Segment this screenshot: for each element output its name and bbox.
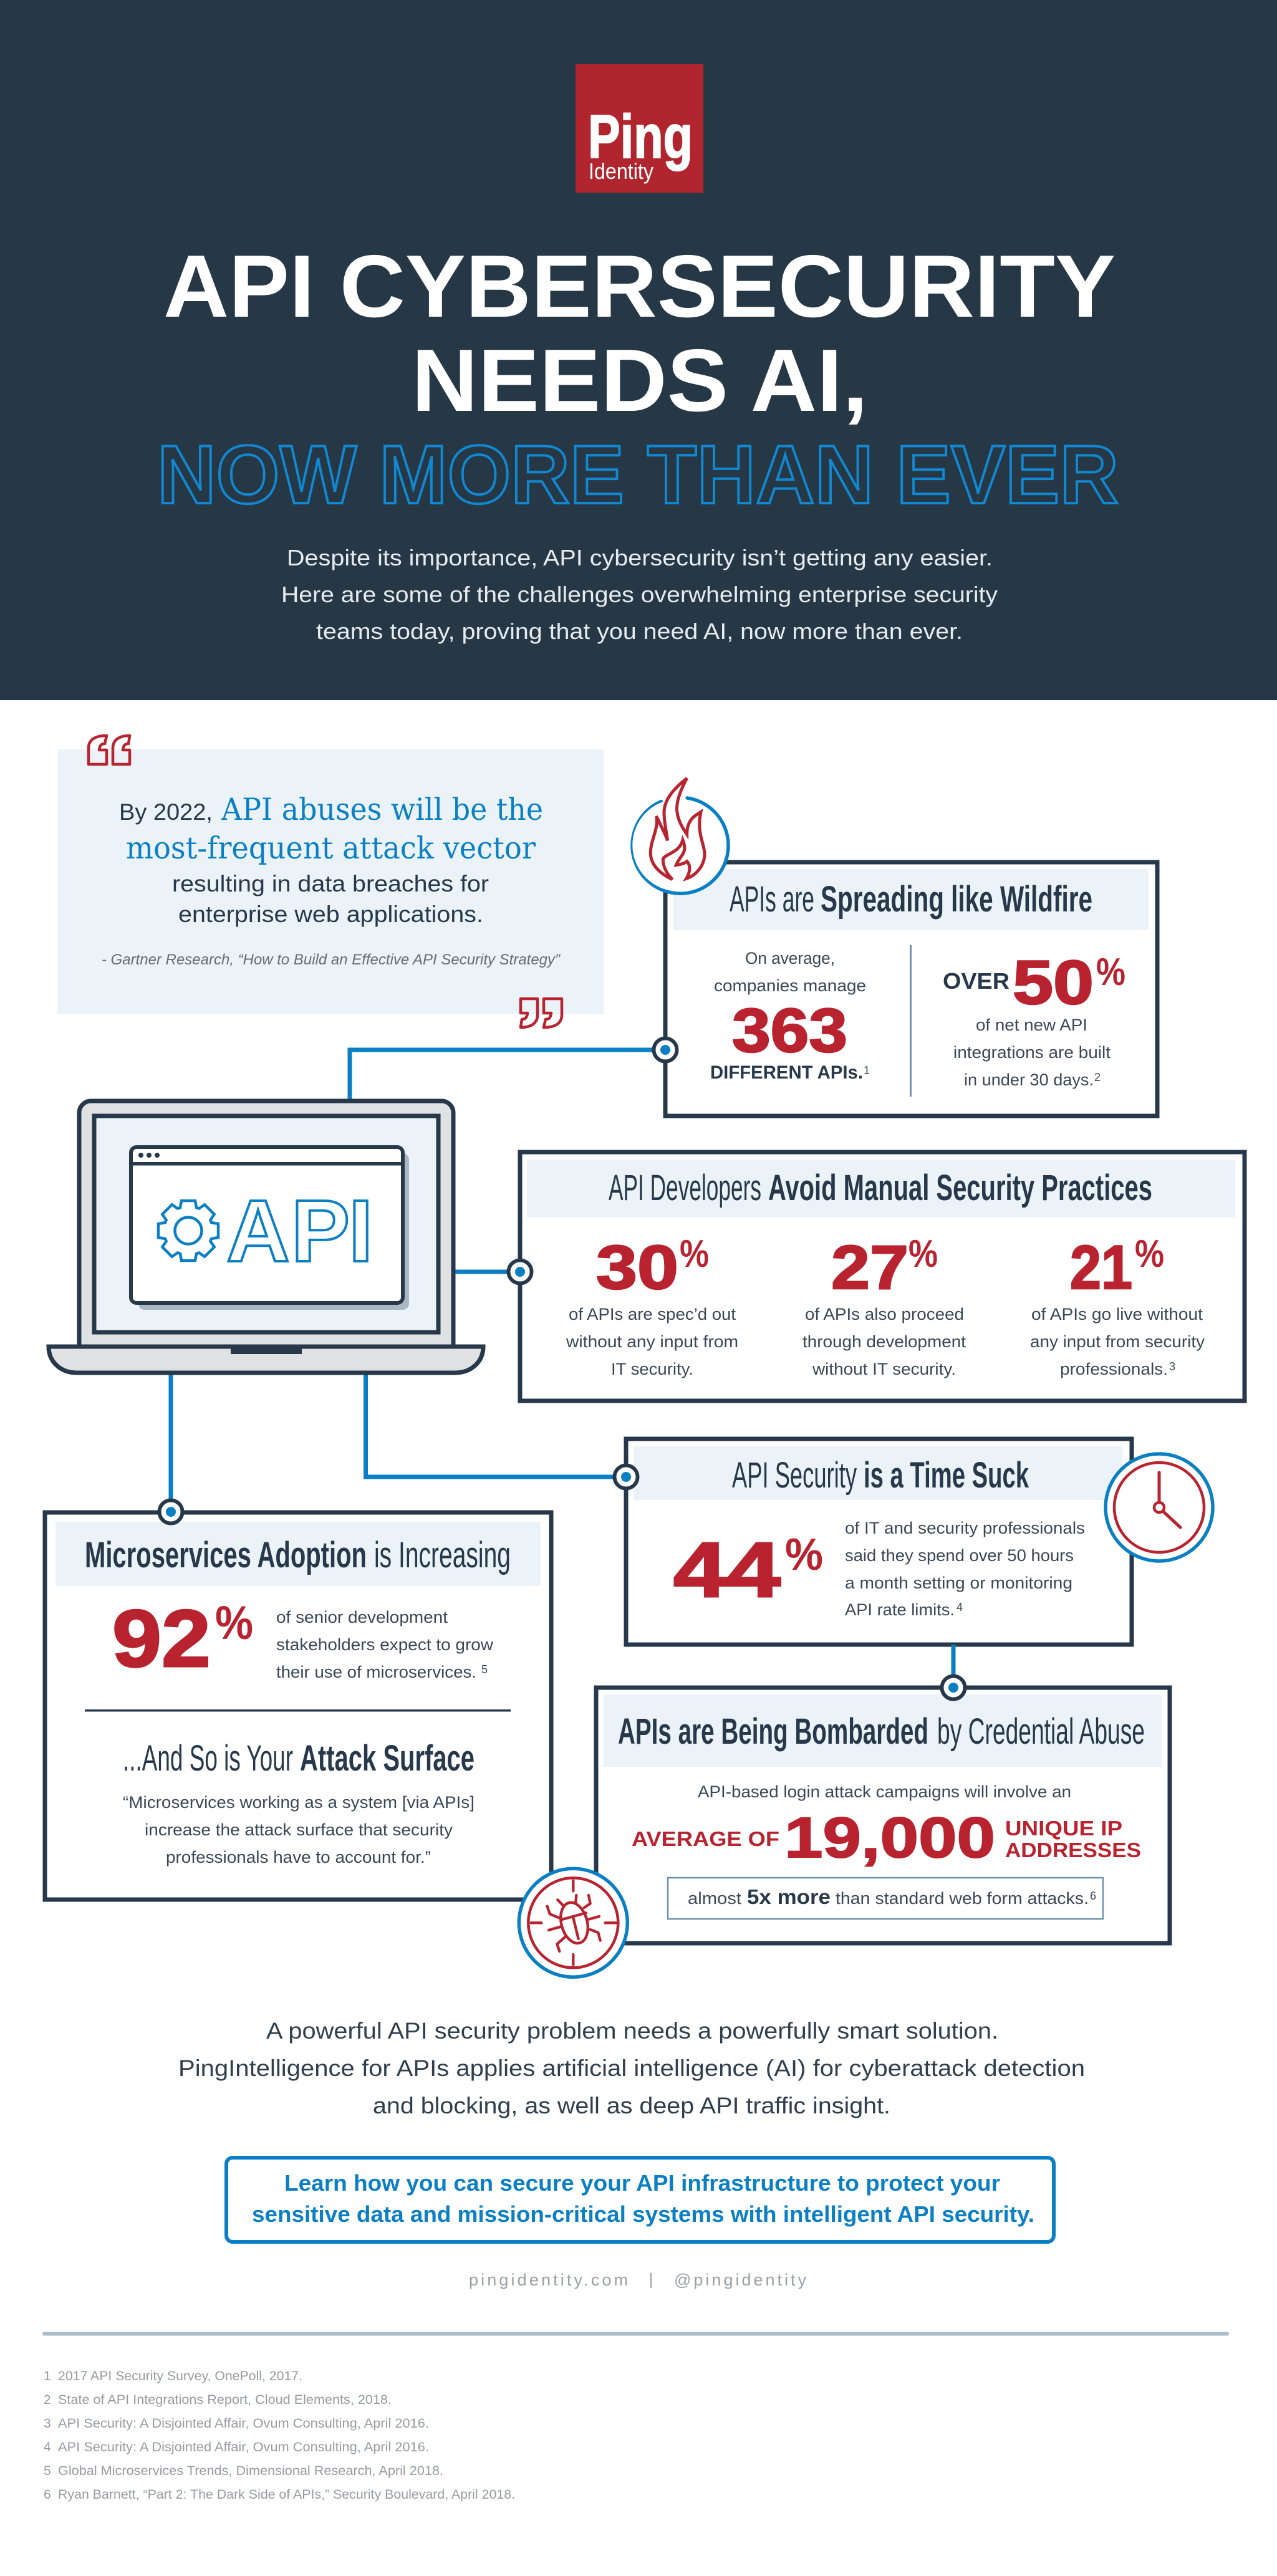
API outlined label: API (226, 1181, 373, 1280)
stat: over 50 percent: OVER (943, 968, 1010, 994)
footnotes: API Security: A Disjointed Affair, Ovum Consulting, April 2016. (58, 2440, 429, 2454)
heading (609, 1168, 1152, 1208)
icon: opening quote mark (89, 736, 130, 764)
quote text: - Gartner Research, “How to Build an Effective API Security Strategy” (102, 951, 561, 968)
stat: 363 different APIs: 363 (732, 996, 847, 1065)
intro paragraph: Here are some of the challenges overwhelming enterprise security (281, 582, 998, 607)
stat: 21 percent: professionals. (1060, 1360, 1168, 1378)
stat: over 50 percent: % (1096, 951, 1125, 994)
logo: Ping Identity: Identity (589, 158, 653, 184)
closing paragraph (178, 2018, 1085, 2118)
panel: APIs are Being Bombarded (596, 1688, 1170, 1943)
stat: 27 percent: without IT security. (812, 1360, 956, 1378)
stat: 27 percent (802, 1233, 966, 1378)
callout: 5x more: 6 (1090, 1890, 1096, 1902)
stat: 30 percent: 30 (596, 1233, 678, 1302)
stat: 19,000 IP addresses: AVERAGE OF (632, 1827, 779, 1850)
heading: Spreading like Wildfire (821, 879, 1092, 920)
intro paragraph: teams today, proving that you need AI, now more than ever. (316, 618, 963, 644)
stat: 27 percent: % (908, 1233, 938, 1276)
stat: 92 percent: % (215, 1597, 253, 1650)
stat: 19,000 IP addresses: ADDRESSES (1005, 1838, 1141, 1862)
footnotes: API Security: A Disjointed Affair, Ovum Consulting, April 2016. (58, 2416, 429, 2431)
stat: 19,000 IP addresses (632, 1782, 1141, 1870)
stat: 363 different APIs (710, 949, 870, 1083)
stat: 27 percent: of APIs also proceed (805, 1305, 964, 1324)
panel: Microservices Adoption (45, 1512, 551, 1900)
heading: APIs are (730, 879, 814, 920)
quote: microservices: “Microservices working as a system [via APIs] (123, 1793, 475, 1812)
stat: 21 percent: 21 (1070, 1233, 1132, 1302)
website and handle (469, 2271, 807, 2289)
stat: 363 different APIs: On average, (745, 949, 835, 968)
stat: 21 percent: of APIs go live without (1031, 1305, 1203, 1324)
heading: is Increasing (374, 1535, 511, 1575)
quote: microservices: professionals have to account for.” (166, 1848, 431, 1867)
callout: 5x more (668, 1878, 1103, 1919)
stat: over 50 percent: 2 (1094, 1071, 1101, 1084)
logo: Ping Identity: Ping (588, 102, 693, 171)
panel: APIs are Spreading like Wildfire (665, 862, 1157, 1116)
quote text: API abuses will be the (221, 792, 543, 827)
heading: by Credential Abuse (937, 1711, 1145, 1752)
call to action box: sensitive data and mission-critical systems with intelligent API security. (252, 2201, 1034, 2227)
stat: 44 percent (673, 1519, 1085, 1619)
stat: 21 percent: any input from security (1030, 1332, 1205, 1351)
stat: 92 percent: their use of microservices. (276, 1663, 476, 1681)
icon: clock (1106, 1454, 1213, 1561)
panel: API Developers Avoid Manual Security Practices (520, 1152, 1245, 1401)
quote text: most-frequent attack vector (126, 830, 536, 866)
sub-heading: attack surface: Attack Surface (300, 1738, 475, 1779)
stat: 21 percent (1030, 1233, 1205, 1378)
quote text (102, 792, 561, 968)
footnotes: 2 (44, 2393, 51, 2407)
panel: API Security is a Time Suck (626, 1439, 1132, 1645)
stat: 363 different APIs: 1 (864, 1064, 870, 1077)
callout: 5x more: than standard web form attacks. (836, 1889, 1089, 1908)
quote panel (57, 736, 604, 1027)
footnotes: 3 (44, 2416, 51, 2431)
stat: 19,000 IP addresses: API-based login attack campaigns will involve an (698, 1782, 1071, 1801)
stat: 30 percent: IT security. (611, 1360, 693, 1378)
heading (730, 879, 1092, 920)
heading: Microservices Adoption (85, 1535, 367, 1575)
title: API CYBERSECURITY (163, 237, 1116, 336)
heading (732, 1455, 1029, 1496)
stat: over 50 percent: integrations are built (953, 1043, 1111, 1062)
stat: 27 percent: 27 (831, 1233, 908, 1302)
connector nodes (160, 1039, 965, 1699)
title: NEEDS AI, (412, 331, 868, 430)
closing paragraph: and blocking, as well as deep API traffic insight. (373, 2093, 890, 2118)
intro paragraph (281, 545, 998, 644)
logo: Ping Identity (576, 64, 703, 193)
website and handle: pingidentity.com (469, 2271, 628, 2289)
stat: 21 percent: % (1135, 1233, 1164, 1276)
call to action box (226, 2158, 1054, 2242)
stat: 30 percent: of APIs are spec’d out (569, 1305, 736, 1324)
icon: laptop with API window (49, 1101, 483, 1373)
heading: API Developers (609, 1168, 761, 1208)
heading: APIs are Being Bombarded (618, 1711, 928, 1752)
footnotes: 5 (44, 2464, 51, 2478)
sub-heading: attack surface: ...And So is Your (123, 1738, 293, 1779)
stat: 44 percent: of IT and security professionals (845, 1519, 1085, 1537)
footnotes: State of API Integrations Report, Cloud Elements, 2018. (58, 2393, 392, 2407)
call to action box: Learn how you can secure your API infrastructure to protect your (284, 2170, 1000, 2196)
quote text: By 2022, (119, 799, 213, 825)
stat: 92 percent: of senior development (276, 1608, 448, 1627)
closing paragraph: PingIntelligence for APIs applies artificial intelligence (AI) for cyberattack detection (178, 2055, 1085, 2081)
stat: 30 percent: % (680, 1233, 709, 1276)
connector lines (171, 1050, 953, 1688)
stat: 92 percent (112, 1593, 494, 1684)
footnotes: 6 (44, 2487, 51, 2502)
icon: bug target (519, 1868, 627, 1977)
stat: 363 different APIs: DIFFERENT APIs. (710, 1062, 863, 1083)
quote: microservices (123, 1793, 475, 1867)
stat: 19,000 IP addresses: 19,000 (784, 1806, 995, 1870)
stat: 44 percent: a month setting or monitoring (845, 1574, 1072, 1592)
heading: API Security (732, 1455, 857, 1496)
stat: 44 percent: % (785, 1530, 823, 1580)
stat: 92 percent: 92 (112, 1593, 211, 1684)
callout: 5x more: almost (688, 1889, 742, 1908)
stat: 363 different APIs: companies manage (714, 976, 866, 995)
footnotes: Global Microservices Trends, Dimensional Research, April 2018. (58, 2464, 443, 2478)
stat: over 50 percent: 50 (1013, 948, 1094, 1017)
quote: microservices: increase the attack surface that security (145, 1820, 453, 1839)
title: outlined subtitle: NOW MORE THAN EVER (157, 429, 1119, 521)
title (163, 237, 1116, 430)
stat: 30 percent: without any input from (566, 1332, 738, 1351)
stat: 30 percent (566, 1233, 738, 1378)
stat: over 50 percent: of net new API (976, 1016, 1087, 1034)
stat: 44 percent: 44 (673, 1527, 781, 1613)
stat: 92 percent: stakeholders expect to grow (276, 1635, 494, 1654)
stat: over 50 percent: in under 30 days. (964, 1070, 1094, 1089)
stat: over 50 percent (943, 948, 1125, 1089)
quote text: resulting in data breaches for (172, 871, 489, 896)
stat: 44 percent: 4 (957, 1601, 963, 1613)
header section (0, 0, 1277, 700)
footnotes (44, 2369, 515, 2502)
stat: 44 percent: said they spend over 50 hours (845, 1546, 1074, 1565)
callout: 5x more: 5x more (747, 1885, 831, 1908)
icon: fire (632, 778, 728, 893)
website and handle: @pingidentity (674, 2271, 807, 2289)
heading: is a Time Suck (864, 1455, 1029, 1496)
stat: 21 percent: 3 (1169, 1360, 1175, 1373)
footnotes: 4 (44, 2440, 51, 2454)
stat: 27 percent: through development (802, 1332, 966, 1351)
stat: 19,000 IP addresses: UNIQUE IP (1005, 1817, 1122, 1840)
icon: gear (158, 1201, 218, 1261)
footnotes: Ryan Barnett, “Part 2: The Dark Side of APIs,” Security Boulevard, April 2018. (58, 2487, 515, 2502)
stat: 92 percent: 5 (481, 1663, 488, 1676)
closing paragraph: A powerful API security problem needs a powerfully smart solution. (266, 2018, 998, 2044)
quote text: enterprise web applications. (178, 901, 483, 927)
footnotes: 1 (44, 2369, 51, 2383)
icon: closing quote mark (521, 999, 562, 1027)
footnotes: 2017 API Security Survey, OnePoll, 2017. (58, 2369, 302, 2383)
intro paragraph: Despite its importance, API cybersecurity isn’t getting any easier. (287, 545, 993, 570)
stat: 44 percent: API rate limits. (845, 1600, 955, 1619)
